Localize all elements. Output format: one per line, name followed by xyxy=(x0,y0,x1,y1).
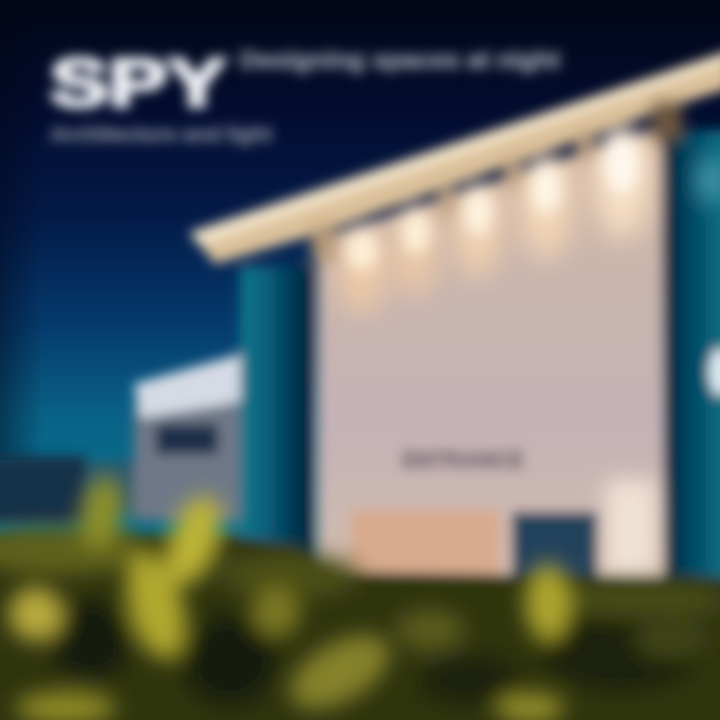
leaf 3 xyxy=(117,547,195,665)
beam 5 xyxy=(652,102,682,142)
background building xyxy=(0,354,240,522)
warm reception area xyxy=(350,510,500,574)
headline line: Designing spaces at night xyxy=(240,47,560,74)
beam 4 xyxy=(576,132,594,160)
beam 1 xyxy=(312,226,336,262)
wall light cores xyxy=(346,134,640,270)
foreground foliage xyxy=(0,473,720,720)
bright wall edge xyxy=(606,480,656,580)
upper right column mark xyxy=(696,156,720,204)
roof canopy xyxy=(190,50,720,264)
leaf 8 xyxy=(396,610,464,650)
olive band right xyxy=(550,582,720,618)
leaf 6 xyxy=(279,621,401,720)
left teal column xyxy=(240,266,314,556)
dark gap 1 xyxy=(50,600,130,680)
dark gap 2 xyxy=(184,616,276,704)
leaf 4 xyxy=(10,588,62,640)
light 2 xyxy=(396,204,436,296)
wall lights xyxy=(338,122,648,314)
core 4 xyxy=(530,162,562,214)
core 1 xyxy=(346,230,378,270)
beam 3 xyxy=(504,158,522,188)
building roof band xyxy=(134,354,240,418)
light 5 xyxy=(596,122,648,238)
leaf 9 xyxy=(496,694,564,720)
subtitle: Architecture and light xyxy=(50,124,272,146)
leaf 7 xyxy=(526,564,570,640)
roof edge xyxy=(190,50,720,264)
foliage base xyxy=(0,535,720,720)
mid skyline xyxy=(86,462,136,512)
core 3 xyxy=(463,188,493,236)
roof glow line xyxy=(190,52,720,246)
right column bright mark xyxy=(709,348,720,396)
light 4 xyxy=(522,151,570,259)
roof beams xyxy=(312,102,682,262)
sky left edge shading xyxy=(0,0,720,460)
dark gap 4 xyxy=(420,656,520,704)
core 2 xyxy=(402,210,430,254)
beam 2 xyxy=(438,186,456,216)
core 5 xyxy=(604,134,640,194)
title: SPY xyxy=(50,45,226,121)
olive band mid xyxy=(220,553,360,597)
leaf 10 xyxy=(16,692,116,720)
main wall xyxy=(318,128,664,580)
light 1 xyxy=(338,226,386,314)
dark window xyxy=(512,512,598,578)
olive band left xyxy=(0,526,150,574)
leaf 5 xyxy=(252,588,300,636)
light 3 xyxy=(456,182,500,278)
leaf 1 xyxy=(76,473,128,551)
right teal column xyxy=(664,130,720,580)
wall sign: ENTRANCE xyxy=(402,447,524,474)
building body xyxy=(134,404,240,520)
leaf 11 xyxy=(634,622,706,658)
building windows xyxy=(156,424,218,454)
dark gap 3 xyxy=(540,610,700,690)
title block xyxy=(50,45,560,146)
distant skyline xyxy=(0,456,86,522)
leaf 2 xyxy=(156,489,232,591)
